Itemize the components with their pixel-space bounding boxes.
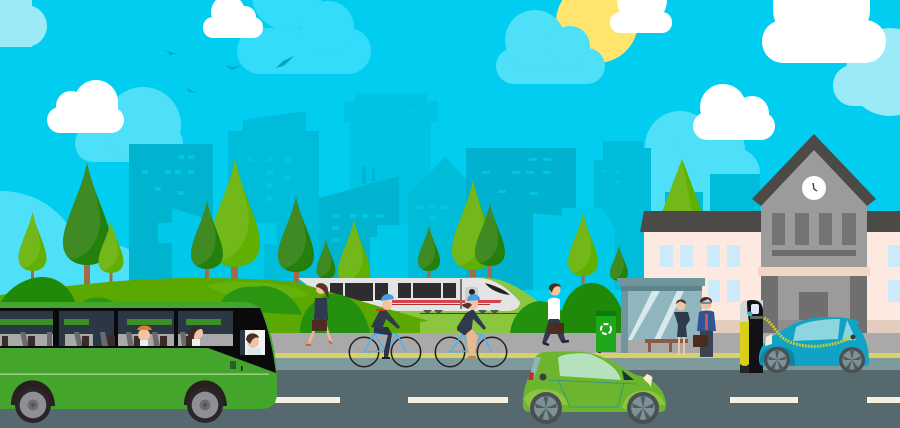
- tree: light right: [568, 213, 598, 284]
- tree: dark centre right: [475, 204, 505, 277]
- bus wheels: [11, 380, 227, 423]
- pavement edge: [0, 358, 900, 370]
- person: man walking: [542, 283, 569, 345]
- cyclist 1: [371, 294, 400, 359]
- recycling bin: [596, 311, 616, 353]
- tree: tall dark left: [63, 163, 111, 288]
- building walls: [644, 231, 900, 320]
- tree: light behind train: [338, 220, 370, 286]
- tree: small light left: [98, 221, 124, 285]
- birds: [163, 50, 294, 93]
- building windows: [660, 245, 900, 302]
- cloud: top right white: [762, 0, 886, 63]
- bushes: [0, 277, 626, 333]
- building roofs: [640, 211, 900, 232]
- person: woman at stop: [674, 300, 690, 356]
- cloud: behind tower light: [645, 111, 760, 216]
- cloud: top-left pale: [0, 0, 47, 47]
- bench: [645, 339, 688, 352]
- clock: [802, 176, 826, 200]
- road: [0, 370, 900, 428]
- hill: light right: [400, 277, 580, 340]
- bicycle 1: [349, 334, 421, 367]
- charging station: [740, 300, 765, 373]
- tree: dark: [278, 197, 314, 283]
- cloud: sun white: [610, 0, 672, 33]
- hill: main green: [0, 278, 470, 333]
- electric car: [759, 317, 869, 373]
- cloud: left white: [47, 80, 124, 133]
- yellow kerb: [0, 353, 900, 358]
- bus window band: [0, 308, 276, 373]
- bus shelter: [617, 278, 705, 353]
- cyclist 2: [457, 294, 486, 359]
- person: woman walking: [306, 283, 332, 345]
- cloud: left light: [75, 87, 183, 163]
- tree: light behind building: [662, 159, 702, 212]
- sun: [556, 0, 638, 63]
- cloud: right pale: [833, 28, 900, 116]
- bus: [0, 302, 277, 423]
- bicycle 2: [435, 334, 507, 367]
- hill: lower light: [420, 316, 540, 333]
- train: [298, 278, 520, 314]
- cloud: lower left big light: [0, 191, 135, 295]
- building: [640, 134, 900, 333]
- sidewalk: [0, 333, 900, 353]
- bus passengers: [137, 326, 203, 346]
- tree: light far left: [18, 212, 46, 279]
- bus windows: [0, 311, 233, 346]
- cloud: upper middle light: [237, 0, 371, 74]
- bus driver window: [240, 330, 265, 355]
- tree: dark beside tall light: [191, 201, 223, 280]
- skyline: [129, 93, 760, 300]
- person: man at stop: [693, 297, 716, 357]
- cloud: lower white right: [693, 84, 775, 140]
- tree: small dark right: [610, 246, 628, 281]
- tree: dark centre: [418, 226, 440, 278]
- tree: tall light: [210, 159, 260, 280]
- hill: lighter swell: [205, 282, 310, 299]
- cloud: upper white: [203, 0, 263, 38]
- tree: tall light centre: [452, 180, 494, 277]
- road dashes: [275, 397, 900, 403]
- cloud: sun light: [496, 10, 605, 84]
- charging cable: [764, 318, 853, 346]
- clock tower: [761, 150, 867, 333]
- green car: [523, 351, 666, 424]
- tree: small dark: [316, 240, 336, 279]
